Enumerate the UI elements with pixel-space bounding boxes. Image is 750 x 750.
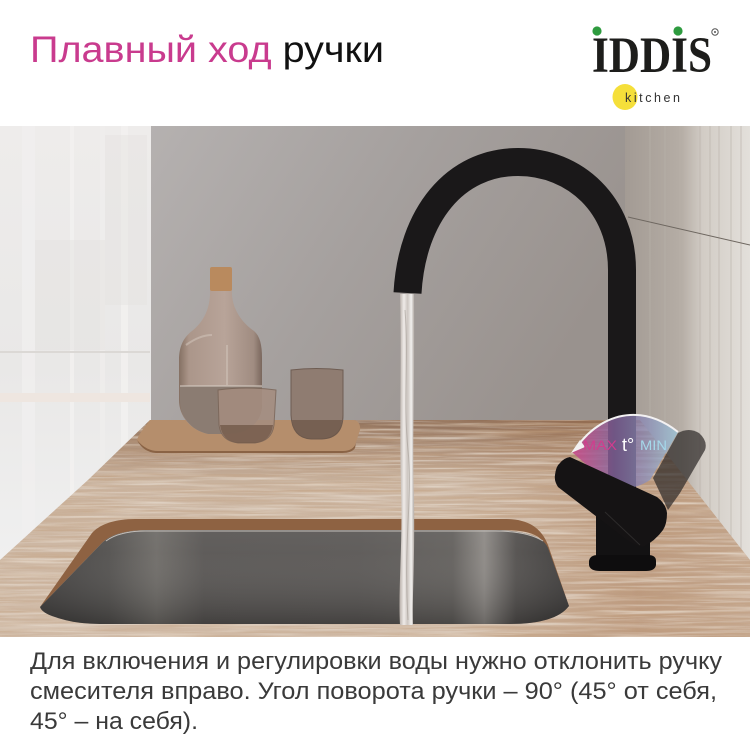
description text bbox=[30, 648, 722, 735]
faucet base bbox=[589, 510, 656, 571]
wall tiles bbox=[625, 126, 750, 570]
rotation indicator: t° bbox=[622, 435, 634, 455]
curtain bbox=[0, 126, 151, 566]
logo: IDDIS kitchen: IDDIS bbox=[592, 28, 712, 84]
water stream bbox=[400, 294, 414, 625]
title: Плавный ход ручки bbox=[30, 29, 384, 70]
countertop bbox=[0, 420, 750, 637]
ghost handle bbox=[653, 430, 706, 510]
rotation indicator: MIN bbox=[640, 437, 667, 453]
logo: IDDIS kitchen: kitchen bbox=[625, 91, 680, 105]
glass: rear bbox=[291, 368, 343, 439]
wall bbox=[150, 126, 630, 436]
sink bowl bbox=[40, 530, 569, 624]
carafe bbox=[179, 267, 262, 434]
panel: kitchen photo bbox=[0, 126, 750, 637]
glass: front bbox=[218, 388, 276, 443]
direction arrow bbox=[580, 414, 678, 442]
faucet spout bbox=[408, 162, 622, 500]
rotation indicator bbox=[571, 415, 706, 510]
tray bbox=[137, 420, 360, 453]
label: MAX t° MIN: MAX bbox=[583, 437, 618, 453]
description text: Для включения и регулировки воды нужно отклонить ручку bbox=[30, 648, 722, 675]
description text: 45° – на себя). bbox=[30, 708, 198, 735]
sink rim bbox=[40, 519, 569, 607]
logo: IDDIS kitchen bbox=[592, 26, 718, 110]
fan sector bbox=[572, 415, 678, 490]
faucet handle bbox=[555, 457, 667, 547]
description text: смесителя вправо. Угол поворота ручки – 90° (45° от себя, bbox=[30, 678, 717, 705]
